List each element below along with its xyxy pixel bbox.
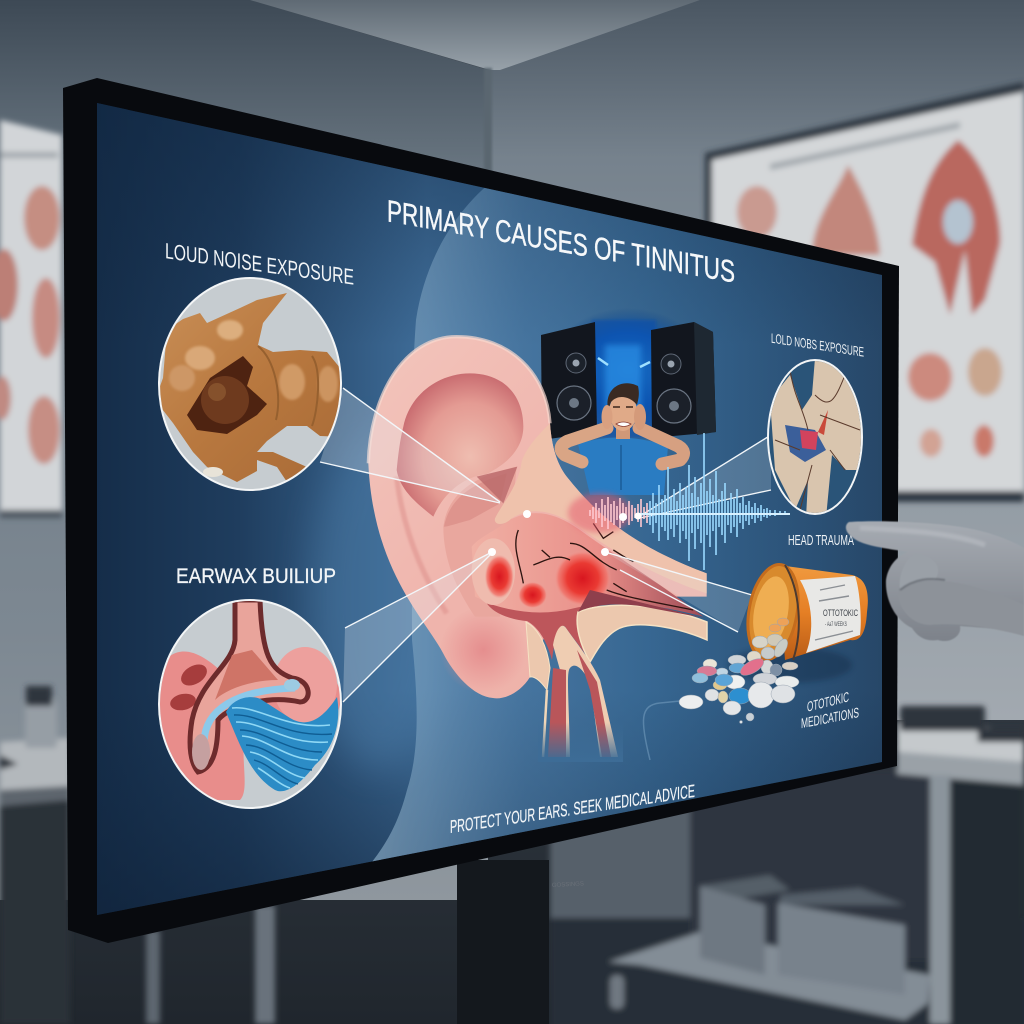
bottle label: [800, 576, 861, 653]
medication bottle: [728, 561, 868, 683]
monitor stand: [457, 860, 549, 1024]
circle: fluid and canal close-up: [158, 599, 342, 809]
spilled pills: [679, 618, 799, 724]
label: earwax buildup: EARWAX BUILIUP: [176, 565, 336, 588]
left speaker: [541, 322, 597, 440]
label: upper right exposure: LOLD NOBS EXPOSURE: [771, 331, 864, 360]
scapha hollow: [397, 373, 523, 517]
right wall anatomy poster: [705, 82, 1024, 502]
callout wedge: water: [343, 552, 492, 702]
concha bowl: [443, 467, 517, 617]
label: ototoxic medications: OTOTOKIC: [807, 690, 849, 716]
label: ototoxic medications: [801, 690, 859, 731]
person covering ears: [561, 383, 684, 495]
medication bottle: - Aa7 WEEKS: [825, 622, 847, 628]
sound waveform: [568, 433, 790, 570]
circle: earwax close-up: [158, 277, 342, 491]
label: loud noise exposure: LOUD NOISE EXPOSURE: [165, 238, 354, 290]
inflamed lesion left: [472, 538, 515, 605]
callout dots: [488, 510, 642, 556]
monitor bezel: GOSSINGS: [552, 881, 584, 889]
ear canal interior: [472, 513, 703, 617]
desks and furniture: [0, 686, 1024, 1024]
callout lines: [320, 388, 771, 702]
callout wedge: medication: [605, 552, 752, 632]
speakers and noise scene: [541, 308, 716, 495]
stems of red tissue: [548, 650, 611, 757]
ear canal upper wall: [495, 423, 707, 593]
circle: cracked temporal bone: [765, 358, 867, 518]
label: head trauma: HEAD TRAUMA: [788, 532, 854, 549]
inflamed lesion small: [519, 582, 546, 608]
footer message: PROTECT YOUR EARS. SEEK MEDICAL ADVICE: [450, 781, 695, 837]
callout wedge: trauma: [640, 435, 771, 516]
screen panel: [97, 100, 882, 920]
dark canal tail: [578, 590, 704, 618]
gloved pointing hand: [846, 521, 1024, 641]
cracks: [516, 523, 693, 610]
middle tissue arch: [553, 626, 618, 757]
ear anatomy: [368, 337, 707, 762]
head silhouette: [372, 188, 737, 862]
right tissue band: [577, 605, 707, 662]
pinna and lobe: [368, 337, 707, 698]
title: PRIMARY CAUSES OF TINNITUS: [387, 193, 735, 290]
left wall poster: [0, 120, 62, 518]
right speaker: [651, 322, 716, 438]
faint chair outline: [642, 700, 679, 760]
medication bottle: OTTOTOKIC: [823, 608, 858, 619]
left tissue band: [526, 622, 550, 690]
deep red canal base: [487, 604, 600, 660]
label: ototoxic medications: MEDICATIONS: [801, 704, 859, 731]
inflamed lesion right: [556, 553, 608, 604]
callout wedge: wax: [320, 388, 500, 502]
upper ear: [368, 337, 707, 698]
